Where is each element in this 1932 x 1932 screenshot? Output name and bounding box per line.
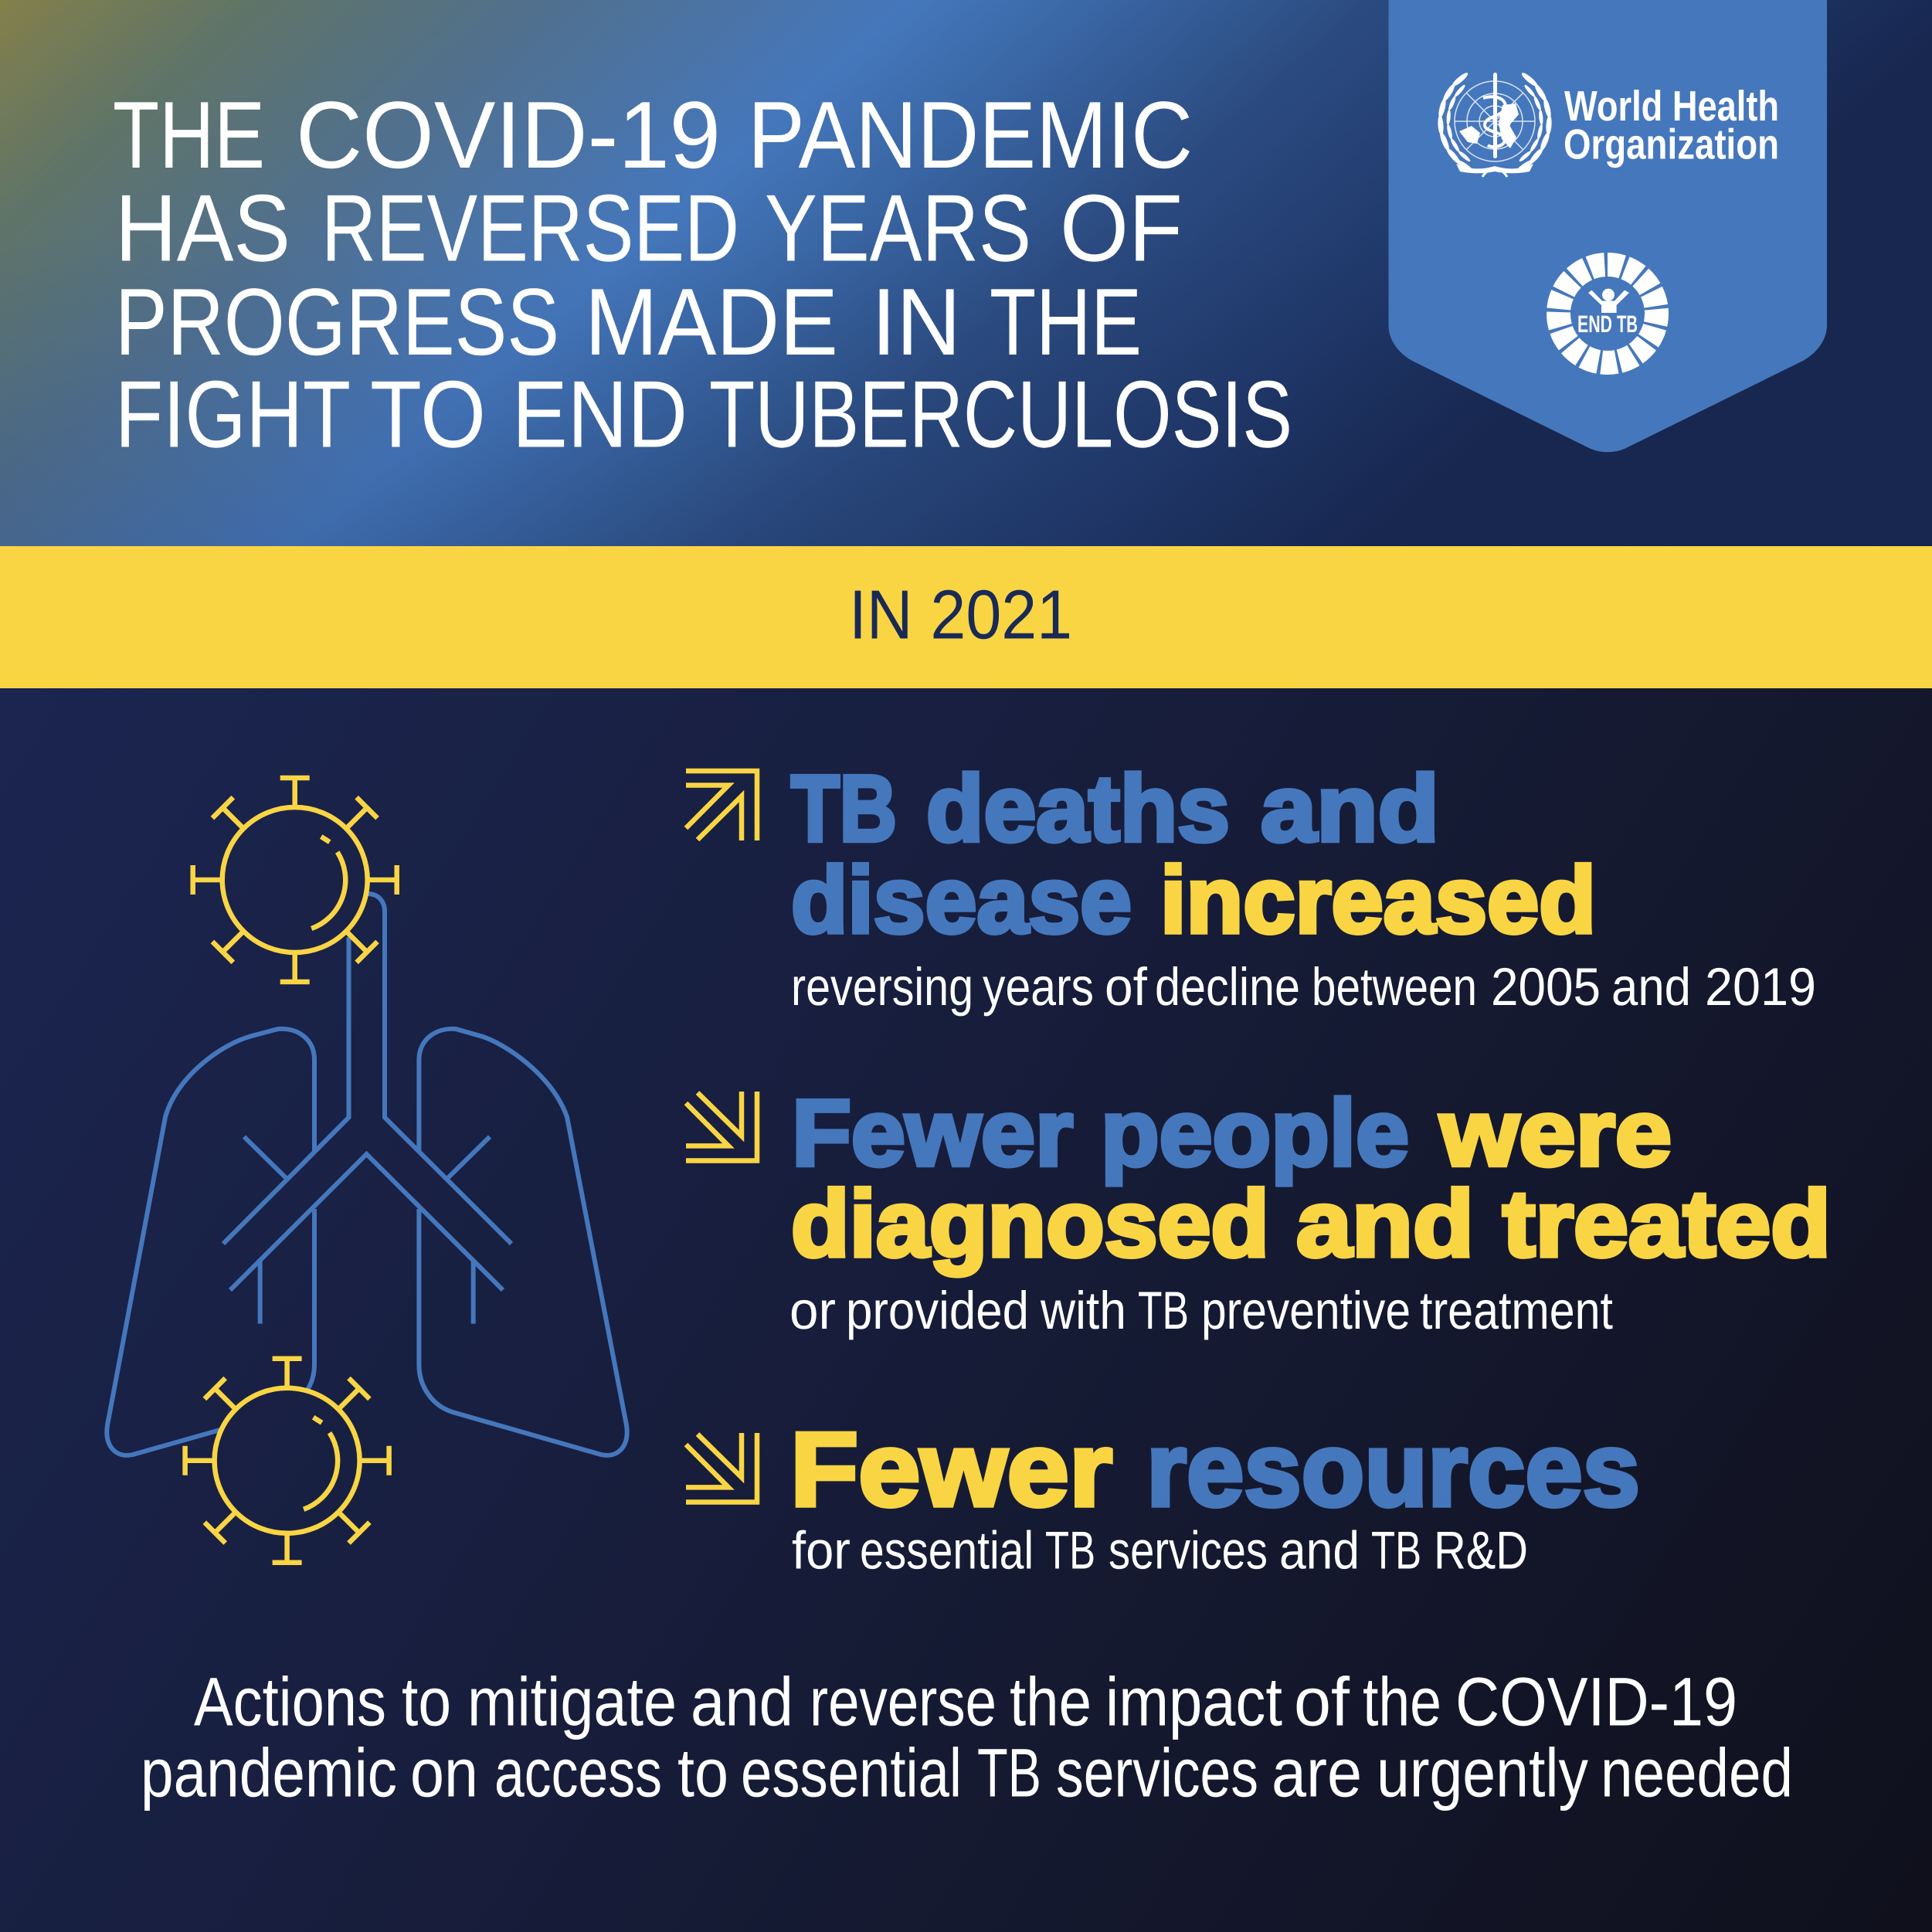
closing statement: COVID-19 xyxy=(1455,1662,1737,1740)
text: or provided with TB preventive treatment: with xyxy=(1040,1281,1126,1340)
title: YEARS xyxy=(765,176,1031,281)
heading: fewer people were diagnosed and treated xyxy=(791,1080,1831,1276)
closing statement: to xyxy=(402,1662,451,1740)
text: reversing years of decline: decline xyxy=(1155,957,1300,1017)
arrow: up, deaths increased xyxy=(686,771,757,840)
closing statement: pandemic xyxy=(141,1733,397,1811)
title: END xyxy=(512,362,688,468)
closing statement: the xyxy=(1010,1662,1092,1740)
title: PROGRESS xyxy=(115,270,559,375)
closing statement: mitigate xyxy=(467,1662,677,1740)
title: FIGHT xyxy=(115,362,351,468)
heading: TB deaths and disease increased: increased xyxy=(1160,847,1596,952)
year band: IN 2021 xyxy=(849,576,1072,654)
text: reversing years of decline: between xyxy=(1312,957,1477,1017)
text: reversing years of decline: years xyxy=(983,957,1094,1017)
lower background xyxy=(0,688,1932,1932)
text: or provided with TB preventive treatment: or xyxy=(789,1281,836,1340)
text: or provided with TB preventive treatment xyxy=(789,1281,1613,1340)
title: COVID-19 xyxy=(296,83,721,188)
closing statement: of xyxy=(1294,1662,1350,1740)
text: reversing years of decline: 2019 xyxy=(1705,957,1816,1017)
text: for essential TB services xyxy=(792,1520,1528,1581)
closing statement: essential xyxy=(741,1733,962,1811)
title: OF xyxy=(1060,176,1183,281)
text: for essential TB services: R&D xyxy=(1434,1520,1528,1581)
title: HAS xyxy=(115,176,290,281)
text: for essential TB services: TB xyxy=(1045,1520,1095,1581)
text: or provided with TB preventive treatment: provided xyxy=(846,1281,1029,1340)
heading: fewer people were diagnosed and treated: people xyxy=(1101,1080,1409,1185)
heading: fewer resources: resources xyxy=(1146,1411,1640,1528)
title: REVERSED xyxy=(321,176,739,281)
closing statement: needed xyxy=(1601,1733,1793,1811)
title: TUBERCULOSIS xyxy=(709,362,1292,468)
heading: TB deaths and disease increased: deaths xyxy=(926,755,1230,861)
heading: fewer people were diagnosed and treated: treated xyxy=(1502,1171,1831,1276)
closing statement: on xyxy=(410,1733,478,1811)
text: or provided with TB preventive treatment: preventive xyxy=(1201,1281,1411,1340)
WHO wordmark xyxy=(1564,82,1779,168)
text: for essential TB services: and xyxy=(1279,1520,1360,1581)
closing statement: are xyxy=(1272,1733,1362,1811)
title xyxy=(113,83,1292,468)
heading: TB deaths and disease increased: TB xyxy=(791,755,897,861)
title: TO xyxy=(370,362,486,468)
closing statement xyxy=(141,1662,1793,1811)
closing statement: and xyxy=(691,1662,793,1740)
closing statement: the xyxy=(1363,1662,1441,1740)
title: THE xyxy=(113,83,265,188)
heading: fewer resources xyxy=(790,1411,1640,1528)
closing statement: reverse xyxy=(810,1662,997,1740)
icon: virus bottom xyxy=(185,1359,389,1563)
heading: TB deaths and disease increased: and xyxy=(1261,755,1439,861)
title: MADE xyxy=(585,270,838,375)
arrow: down, fewer resources xyxy=(686,1433,757,1502)
text: reversing years of decline xyxy=(791,957,1816,1017)
icon: lungs xyxy=(107,894,627,1455)
closing statement: to xyxy=(677,1733,728,1811)
heading: fewer resources: Fewer xyxy=(790,1411,1112,1528)
panel: logo shield xyxy=(1389,0,1827,452)
year band xyxy=(0,546,1932,688)
text: reversing years of decline: and xyxy=(1611,957,1691,1017)
heading: fewer people were diagnosed and treated: Fewer xyxy=(792,1080,1073,1185)
closing statement: services xyxy=(1056,1733,1258,1811)
title: PANDEMIC xyxy=(748,83,1193,188)
WHO wordmark: World Health xyxy=(1564,82,1779,130)
text: reversing years of decline: reversing xyxy=(791,957,973,1017)
header background xyxy=(0,0,1932,546)
icon: End TB logo xyxy=(1559,264,1656,363)
icon: End TB logo: END xyxy=(1577,311,1612,338)
text: or provided with TB preventive treatment: treatment xyxy=(1420,1281,1613,1340)
icon: WHO emblem xyxy=(1437,71,1553,177)
heading: TB deaths and disease increased xyxy=(791,755,1596,952)
WHO wordmark: Organization xyxy=(1564,121,1779,168)
closing statement: Actions xyxy=(194,1662,386,1740)
heading: TB deaths and disease increased: disease xyxy=(791,847,1132,952)
closing statement: TB xyxy=(977,1733,1041,1811)
closing statement: access xyxy=(494,1733,662,1811)
closing statement: impact xyxy=(1105,1662,1282,1740)
title: THE xyxy=(990,270,1142,375)
text: for essential TB services: services xyxy=(1109,1520,1268,1581)
arrow: down, fewer diagnosed xyxy=(686,1092,757,1160)
text: or provided with TB preventive treatment: TB xyxy=(1138,1281,1189,1340)
heading: fewer people were diagnosed and treated: were xyxy=(1439,1080,1672,1185)
text: for essential TB services: for xyxy=(792,1520,851,1581)
text: for essential TB services: TB xyxy=(1371,1520,1421,1581)
heading: fewer people were diagnosed and treated: diagnosed xyxy=(791,1171,1269,1276)
text: reversing years of decline: 2005 xyxy=(1491,957,1601,1017)
closing statement: urgently xyxy=(1377,1733,1588,1811)
icon: virus top xyxy=(193,778,397,982)
icon: End TB logo: TB xyxy=(1617,311,1638,338)
text: for essential TB services: essential xyxy=(860,1520,1034,1581)
title: IN xyxy=(871,270,961,375)
heading: fewer people were diagnosed and treated: and xyxy=(1296,1171,1474,1276)
text: reversing years of decline: of xyxy=(1105,957,1148,1017)
